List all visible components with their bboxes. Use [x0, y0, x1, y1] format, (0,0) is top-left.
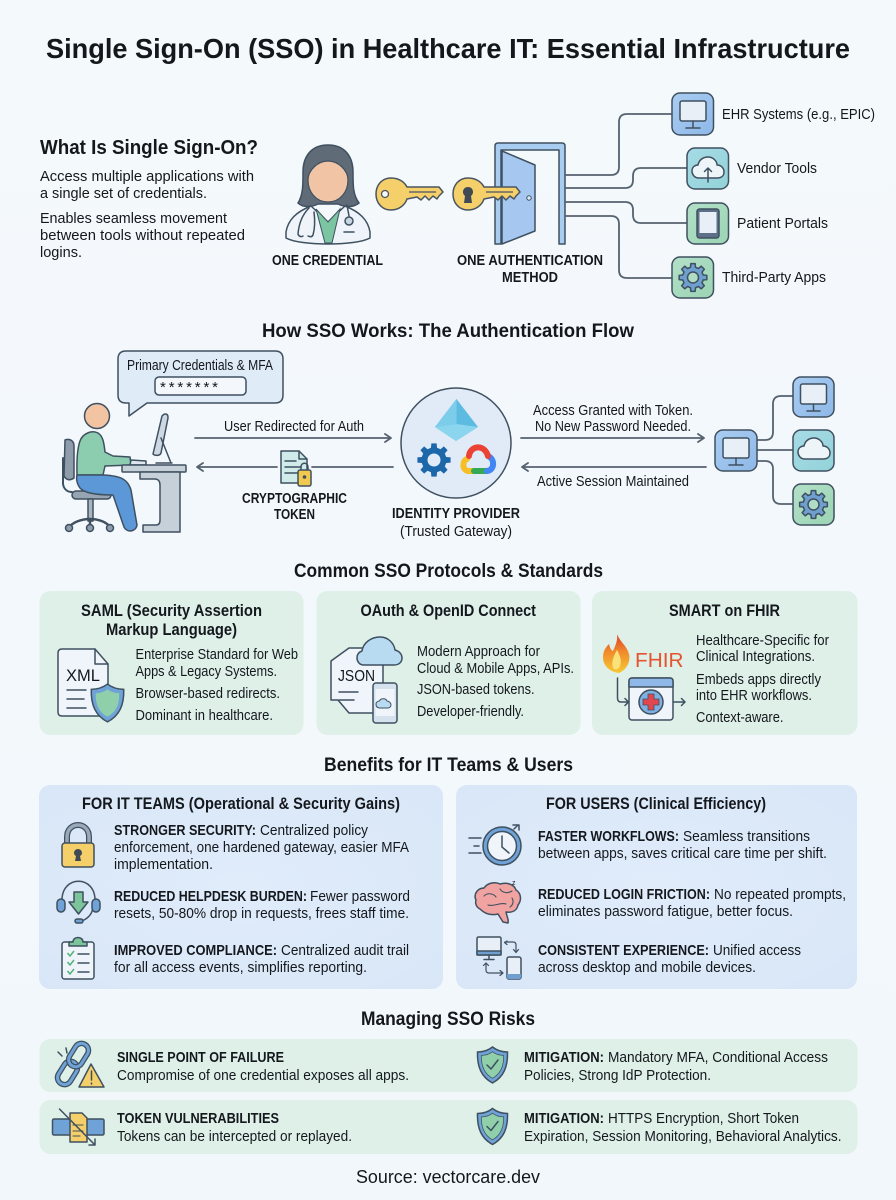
arrow: access granted with token — [521, 402, 704, 442]
text block: FHIR details: into EHR workflows. — [696, 687, 812, 704]
text block: SAML details: Apps & Legacy Systems. — [136, 663, 277, 680]
arrow: user redirected for auth: User Redirected for Auth — [224, 418, 364, 435]
text block: reduced helpdesk burden — [114, 888, 410, 922]
label: patient portals: Patient Portals — [737, 215, 828, 232]
text block: reduced login friction — [538, 886, 846, 920]
connector lines to applications — [566, 114, 687, 278]
text block: SSO definition: Enables seamless movement — [40, 210, 228, 227]
text block: mitigation for single point of failure: Mandatory MFA, Conditional Access — [608, 1049, 828, 1066]
text block: reduced login friction: eliminates password fatigue, better focus. — [538, 903, 793, 920]
icon: clock — [469, 825, 521, 865]
text block: improved compliance: for all access events, simplifies reporting. — [114, 959, 367, 976]
text block: consistent experience: CONSISTENT EXPERIENCE: — [538, 942, 709, 959]
text block: stronger security: Centralized policy — [260, 822, 368, 839]
text block: SAML details — [136, 646, 298, 724]
icon: app cloud — [793, 430, 834, 471]
label: one authentication method: ONE AUTHENTICATION — [457, 253, 603, 269]
connector lines: hub to apps — [757, 396, 793, 504]
label: identity provider: (Trusted Gateway) — [400, 523, 512, 540]
heading: how SSO works: How SSO Works: The Authentication Flow — [262, 320, 635, 342]
icon: app gear — [793, 484, 834, 525]
heading: for users: FOR USERS (Clinical Efficiency) — [546, 795, 766, 813]
icon: vendor tools cloud — [687, 148, 728, 189]
text block: SSO definition: between tools without repeated — [40, 227, 245, 244]
panel: token vulnerabilities risk — [40, 1100, 858, 1154]
text block: reduced helpdesk burden: resets, 50-80% drop in requests, frees staff time. — [114, 905, 409, 922]
icon: headset with down arrow — [57, 881, 100, 923]
text block: mitigation for token vulnerabilities: HTTPS Encryption, Short Token — [608, 1110, 799, 1127]
icon: brain — [475, 880, 520, 923]
text block: single point of failure: SINGLE POINT OF FAILURE — [117, 1049, 284, 1066]
text block: stronger security: STRONGER SECURITY: — [114, 822, 256, 839]
text block: OAuth details — [417, 643, 574, 720]
text block: mitigation for token vulnerabilities: Expiration, Session Monitoring, Behavioral Analytics. — [524, 1128, 842, 1145]
icon: compliance clipboard — [62, 938, 94, 979]
text block: consistent experience: Unified access — [713, 942, 801, 959]
icon: patient portals tablet — [687, 203, 728, 244]
arrow: user redirected for auth — [195, 418, 391, 442]
icon: XML document with shield — [58, 649, 124, 722]
text block: SSO definition: logins. — [40, 244, 82, 261]
text block: improved compliance — [114, 942, 409, 976]
icon: intercepted token — [52, 1109, 104, 1145]
icon: hub monitor — [715, 430, 757, 471]
icon: brain: z — [512, 880, 516, 887]
text block: stronger security: implementation. — [114, 856, 213, 873]
callout: primary credentials and MFA: Primary Credentials & MFA — [127, 357, 273, 374]
heading: benefits: Benefits for IT Teams & Users — [324, 754, 573, 776]
heading: SAML — [81, 602, 262, 639]
panel: OAuth and OpenID Connect — [316, 591, 580, 735]
panel: for IT teams — [39, 785, 443, 989]
text block: SAML details: Browser-based redirects. — [136, 685, 280, 702]
callout: primary credentials and MFA: ******* — [160, 379, 218, 396]
text block: SAML details: Enterprise Standard for Web — [136, 646, 298, 663]
text block: SSO definition: Access multiple applications with — [40, 168, 254, 185]
text block: FHIR details: Embeds apps directly — [696, 671, 821, 688]
text block: mitigation for single point of failure — [524, 1049, 828, 1084]
text block: reduced helpdesk burden: Fewer password — [310, 888, 410, 905]
text block: token vulnerabilities — [117, 1110, 352, 1145]
heading: what is SSO: What Is Single Sign-On? — [40, 137, 258, 159]
icon: XML document with shield: XML — [66, 666, 100, 685]
heading: managing risks: Managing SSO Risks — [361, 1008, 535, 1030]
source line: Source: vectorcare.dev — [356, 1167, 540, 1187]
label: one authentication method: METHOD — [502, 270, 558, 286]
callout: primary credentials and MFA — [118, 351, 283, 416]
text block: SAML details: Dominant in healthcare. — [136, 707, 273, 724]
section: authentication flow — [63, 351, 834, 540]
icon: JSON document, cloud and phone — [331, 637, 402, 723]
icon: cryptographic token document — [281, 451, 311, 486]
icon: key — [376, 178, 443, 210]
title: Single Sign-On (SSO) in Healthcare IT: Essential Infrastructure — [46, 33, 850, 64]
icon: door with key — [453, 143, 565, 244]
text block: stronger security — [114, 822, 409, 873]
text block: FHIR details: Context-aware. — [696, 709, 784, 726]
section: what is single sign-on — [40, 93, 875, 298]
text block: stronger security: enforcement, one hardened gateway, easier MFA — [114, 839, 409, 856]
label: one credential: ONE CREDENTIAL — [272, 253, 383, 269]
text block: faster workflows: Seamless transitions — [683, 828, 810, 845]
icon: third-party apps gear — [672, 257, 714, 298]
icon: padlock — [62, 825, 94, 867]
text block: SSO definition: a single set of credentials. — [40, 185, 207, 202]
arrow: token returned — [197, 463, 393, 471]
arrow: active session maintained: Active Session Maintained — [537, 473, 689, 490]
panel: for users — [456, 785, 857, 989]
label: identity provider: IDENTITY PROVIDER — [392, 505, 520, 522]
heading: SAML: SAML (Security Assertion — [81, 602, 262, 620]
text block: mitigation for single point of failure: Policies, Strong IdP Protection. — [524, 1067, 711, 1084]
heading: SMART on FHIR: SMART on FHIR — [669, 602, 780, 620]
text block: FHIR details: Healthcare-Specific for — [696, 632, 829, 649]
label: third-party apps: Third-Party Apps — [722, 269, 826, 286]
icon: doctor — [286, 145, 370, 244]
text block: reduced login friction: REDUCED LOGIN FRICTION: — [538, 886, 710, 903]
text block: faster workflows — [538, 828, 827, 862]
label: vendor tools: Vendor Tools — [737, 160, 817, 177]
text block: single point of failure — [117, 1049, 409, 1084]
text block: faster workflows: between apps, saves critical care time per shift. — [538, 845, 827, 862]
icon: mitigation shield — [477, 1047, 508, 1083]
icon: mitigation shield — [477, 1108, 508, 1144]
text block: consistent experience: across desktop and mobile devices. — [538, 959, 756, 976]
text block: mitigation for single point of failure: MITIGATION: — [524, 1049, 604, 1066]
text block: mitigation for token vulnerabilities — [524, 1110, 842, 1145]
heading: protocols and standards: Common SSO Protocols & Standards — [294, 560, 603, 582]
icon: desktop and mobile sync — [477, 937, 521, 979]
panel: SAML — [40, 591, 304, 735]
text block: OAuth details: JSON-based tokens. — [417, 681, 534, 698]
icon: identity provider circle — [401, 388, 511, 498]
label: cryptographic token: CRYPTOGRAPHIC — [242, 491, 347, 507]
icon: user at workstation — [63, 404, 186, 532]
icon: JSON document, cloud and phone: JSON — [338, 668, 375, 685]
label: one authentication method — [457, 253, 603, 286]
text block: reduced helpdesk burden: REDUCED HELPDESK BURDEN: — [114, 888, 307, 905]
text block: consistent experience — [538, 942, 801, 976]
icon: EHR systems monitor — [672, 93, 714, 135]
text block: OAuth details: Cloud & Mobile Apps, APIs. — [417, 660, 574, 677]
text block: improved compliance: Centralized audit trail — [281, 942, 409, 959]
label: EHR systems: EHR Systems (e.g., EPIC) — [722, 106, 875, 123]
icon: FHIR flame logo — [603, 634, 684, 673]
text block: token vulnerabilities: TOKEN VULNERABILITIES — [117, 1110, 279, 1127]
label: cryptographic token — [242, 491, 347, 523]
text block: reduced login friction: No repeated prompts, — [714, 886, 846, 903]
heading: OAuth: OAuth & OpenID Connect — [360, 602, 536, 620]
text block: OAuth details: Modern Approach for — [417, 643, 540, 660]
text block: token vulnerabilities: Tokens can be intercepted or replayed. — [117, 1128, 352, 1145]
text block: FHIR details: Clinical Integrations. — [696, 648, 815, 665]
icon: broken chain with warning — [55, 1041, 104, 1087]
arrow: access granted with token: No New Password Needed. — [535, 418, 691, 435]
icon: embedded app window — [618, 678, 685, 720]
arrow: active session maintained — [522, 463, 706, 490]
icon: app monitor — [793, 377, 834, 417]
text block: faster workflows: FASTER WORKFLOWS: — [538, 828, 679, 845]
panel: SMART on FHIR — [592, 591, 858, 735]
text block: OAuth details: Developer-friendly. — [417, 703, 524, 720]
arrow: access granted with token: Access Granted with Token. — [533, 402, 693, 419]
label: identity provider — [392, 505, 520, 540]
text block: single point of failure: Compromise of one credential exposes all apps. — [117, 1067, 409, 1084]
heading: SAML: Markup Language) — [106, 621, 237, 639]
text block: improved compliance: IMPROVED COMPLIANCE: — [114, 942, 277, 959]
text block: FHIR details — [696, 632, 829, 726]
icon: FHIR flame logo: FHIR — [635, 650, 684, 672]
panel: single point of failure risk — [40, 1039, 858, 1092]
text block: mitigation for token vulnerabilities: MITIGATION: — [524, 1110, 604, 1127]
label: cryptographic token: TOKEN — [274, 507, 315, 523]
heading: for IT teams: FOR IT TEAMS (Operational & Security Gains) — [82, 795, 400, 813]
text block: SSO definition — [40, 168, 254, 261]
